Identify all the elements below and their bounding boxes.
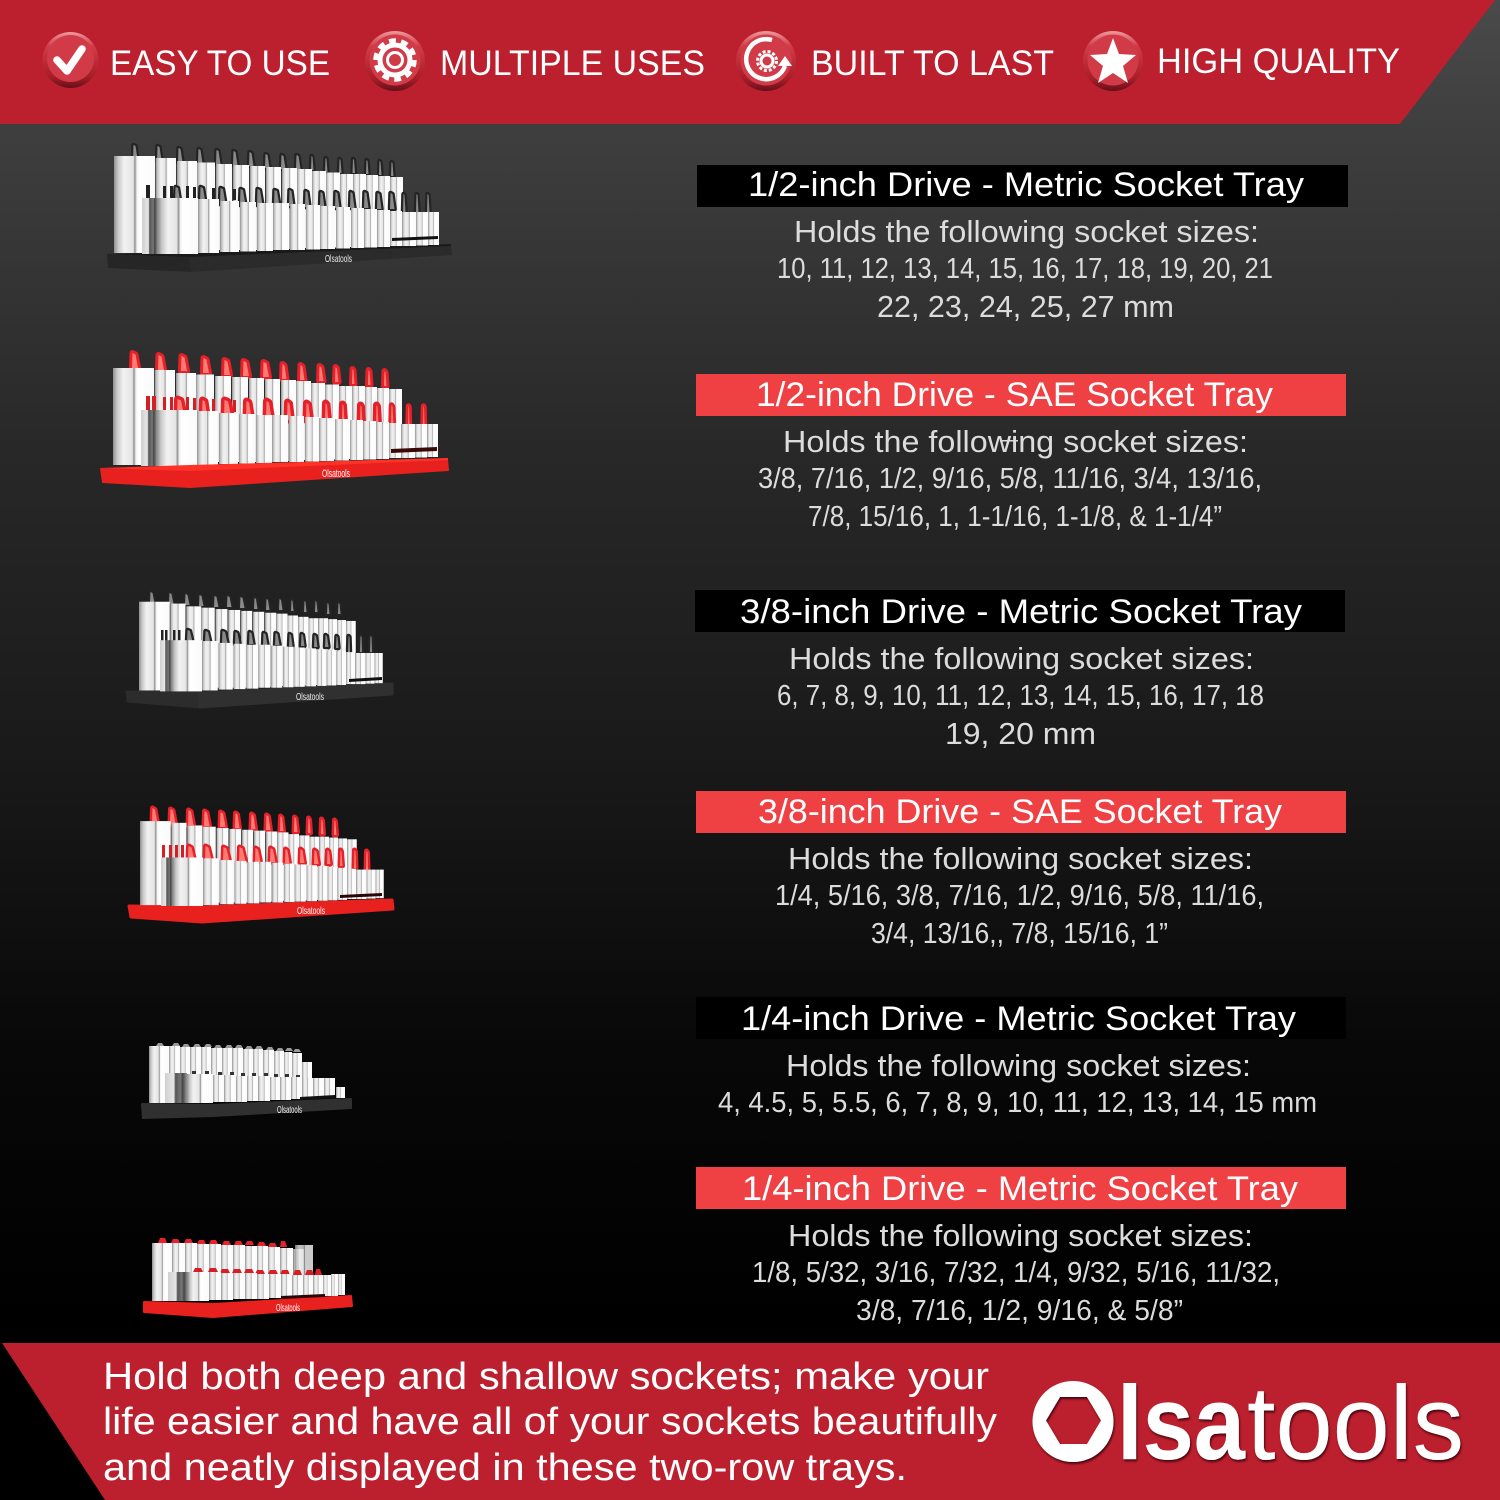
sizes text: 3/8, 7/16, 1/2, 9/16, 5/8, 11/16, 3/4, 13/16, bbox=[758, 463, 1262, 495]
footer text: life easier and have all of your sockets beautifully bbox=[103, 1401, 997, 1443]
sizes text: 10, 11, 12, 13, 14, 15, 16, 17, 18, 19, 20, 21 bbox=[777, 253, 1273, 285]
tray logo: Olsatools bbox=[322, 468, 350, 480]
sizes text: 3/4, 13/16,, 7/8, 15/16, 1” bbox=[871, 918, 1168, 950]
tray logo: Olsatools bbox=[277, 1105, 302, 1116]
tray: 3/8 metric black bbox=[127, 592, 392, 707]
sizes text bbox=[777, 641, 1264, 751]
heading: 3/8-inch Drive - Metric Socket Tray bbox=[740, 593, 1302, 631]
sizes text: 1/4, 5/16, 3/8, 7/16, 1/2, 9/16, 5/8, 11/16, bbox=[775, 880, 1264, 912]
sizes text: Holds the following socket sizes: bbox=[783, 424, 1248, 459]
sizes text: Holds the following socket sizes: bbox=[788, 1218, 1253, 1253]
tray: 3/8 SAE red bbox=[129, 808, 393, 922]
label: high quality: HIGH QUALITY bbox=[1157, 42, 1400, 81]
tray logo: Olsatools bbox=[276, 1302, 300, 1314]
logo bbox=[1033, 1365, 1464, 1482]
sizes text: 19, 20 mm bbox=[945, 716, 1096, 751]
tray: 1/2 metric black bbox=[107, 145, 451, 271]
label: easy to use: EASY TO USE bbox=[110, 44, 330, 83]
sizes text bbox=[775, 841, 1264, 950]
panel: 3/8 SAE bbox=[696, 791, 1346, 950]
sizes text: 6, 7, 8, 9, 10, 11, 12, 13, 14, 15, 16, 17, 18 bbox=[777, 680, 1264, 712]
tray: 1/4 SAE red bbox=[144, 1238, 352, 1317]
panel: 1/2 metric bbox=[697, 165, 1348, 324]
label: built to last: BUILT TO LAST bbox=[811, 44, 1054, 83]
sizes text: Holds the following socket sizes: bbox=[786, 1048, 1251, 1083]
footer text bbox=[103, 1356, 997, 1489]
heading: 1/2-inch Drive - SAE Socket Tray bbox=[756, 376, 1273, 414]
header banner bbox=[0, 0, 1495, 124]
sizes text: 7/8, 15/16, 1, 1-1/16, 1-1/8, & 1-1/4” bbox=[808, 501, 1222, 533]
sizes text: 4, 4.5, 5, 5.5, 6, 7, 8, 9, 10, 11, 12, 13, 14, 15 mm bbox=[718, 1087, 1317, 1119]
sizes text: 22, 23, 24, 25, 27 mm bbox=[877, 289, 1174, 324]
panel: 3/8 metric bbox=[695, 590, 1345, 751]
icon: star bbox=[1083, 31, 1143, 91]
sizes text: Holds the following socket sizes: bbox=[788, 841, 1253, 876]
tray logo: Olsatools bbox=[325, 253, 352, 265]
heading: 1/2-inch Drive - Metric Socket Tray bbox=[748, 166, 1304, 204]
footer text: and neatly displayed in these two-row trays. bbox=[103, 1447, 907, 1489]
heading: 3/8-inch Drive - SAE Socket Tray bbox=[758, 793, 1282, 831]
sizes text bbox=[752, 1218, 1280, 1327]
footer banner bbox=[2, 1343, 1500, 1500]
panel: 1/4 metric black bbox=[696, 997, 1346, 1119]
logo: lsa bbox=[1117, 1365, 1246, 1482]
sizes text: 1/8, 5/32, 3/16, 7/32, 1/4, 9/32, 5/16, 11/32, bbox=[752, 1257, 1280, 1289]
icon: gear bbox=[365, 31, 425, 91]
sizes text: Holds the following socket sizes: bbox=[794, 214, 1259, 249]
heading: 1/4-inch Drive - Metric Socket Tray bbox=[741, 1000, 1296, 1038]
heading: 1/4-inch Drive - Metric Socket Tray bbox=[742, 1170, 1298, 1208]
sizes text: Holds the following socket sizes: bbox=[789, 641, 1254, 676]
sizes text: 3/8, 7/16, 1/2, 9/16, & 5/8” bbox=[856, 1295, 1183, 1327]
panel: 1/4 metric red bbox=[696, 1167, 1346, 1327]
label: multiple uses: MULTIPLE USES bbox=[440, 44, 705, 83]
tray: 1/4 metric black bbox=[142, 1043, 351, 1118]
tray: 1/2 SAE red bbox=[100, 353, 448, 487]
footer text: Hold both deep and shallow sockets; make your bbox=[103, 1356, 989, 1398]
tray logo: Olsatools bbox=[297, 905, 325, 917]
panel: 1/2 SAE bbox=[696, 374, 1346, 533]
sizes text bbox=[718, 1048, 1317, 1119]
logo: tools bbox=[1247, 1365, 1464, 1482]
icon: check mark bbox=[42, 32, 98, 88]
sizes text bbox=[777, 214, 1273, 324]
sizes text bbox=[758, 424, 1262, 533]
icon: rotating gear bbox=[736, 31, 796, 91]
tray logo: Olsatools bbox=[296, 691, 324, 703]
